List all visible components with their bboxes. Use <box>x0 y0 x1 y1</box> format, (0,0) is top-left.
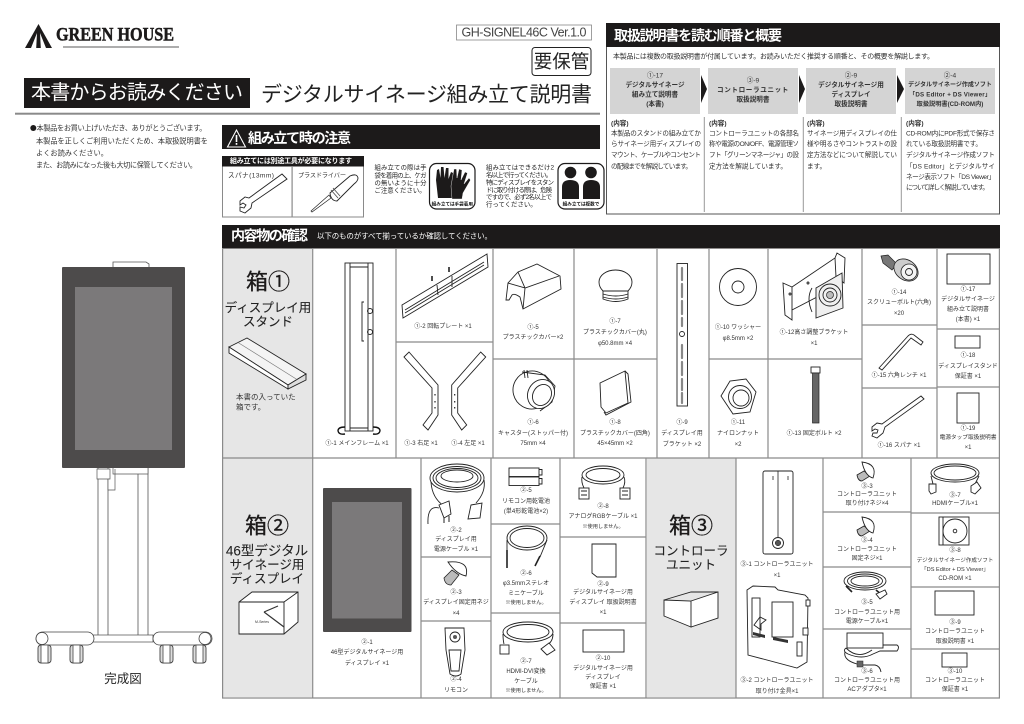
text: two people note <box>486 162 554 208</box>
item: stereo mini cable: ②-6 <box>520 569 532 577</box>
item: main frame <box>325 263 389 447</box>
item: controller warranty: ③-10 <box>948 667 963 675</box>
box 1 heading: ディスプレイ用 <box>225 300 311 315</box>
item: display screw: ②-3 <box>450 588 462 596</box>
item: power strip manual: ①-19 <box>961 424 976 432</box>
item: spanner <box>872 396 924 449</box>
item: controller power cable: 電源ケーブル×1 <box>846 617 889 625</box>
item: height adjustment bracket: ×1 <box>811 341 818 347</box>
illustration: assembled display on stand <box>36 262 212 663</box>
item: fixing screws <box>837 517 897 562</box>
item: AC adapter: コントローラユニット用 <box>834 677 900 684</box>
item: display screw: ディスプレイ固定用ネジ <box>423 598 489 606</box>
item: display bracket: ディスプレイ用 <box>661 429 703 437</box>
item: nylon nut: ×2 <box>735 442 742 448</box>
item: mounting bracket: ③-2 コントローラユニット <box>740 676 814 684</box>
top mount <box>113 262 149 267</box>
item: mounting screws <box>837 462 897 507</box>
item: analog RGB cable: ※使用しません。 <box>582 522 624 530</box>
item: controller power cable <box>834 572 900 625</box>
item: controller manual: ③-9 <box>949 618 961 626</box>
text: box note: 箱です。 <box>236 402 265 412</box>
text: box note: 本書の入っていた <box>236 392 296 402</box>
item: plastic cover: プラスチックカバー×2 <box>503 334 564 341</box>
manual step 2: コントローラユニットの各部名 <box>709 128 799 138</box>
manual step 4: (内容) <box>906 118 924 128</box>
panel: contents header <box>222 225 1000 248</box>
item: hex wrench <box>872 334 927 379</box>
item: mounting screws: 取り付けネジ×4 <box>846 499 889 507</box>
text: two people note: 組み立てはできるだけ2 <box>486 162 554 172</box>
text: box note <box>236 392 296 412</box>
item: height adjustment bracket: ①-12高さ調整ブラケット <box>780 328 848 336</box>
item: fixing screws: コントローラユニット <box>837 546 897 553</box>
item: square plastic cover: プラスチックカバー(四角) <box>580 429 650 437</box>
item: controller manual <box>925 591 985 645</box>
icon: display box: M-Series <box>255 620 269 624</box>
item: rotation plate: ①-2 回転プレート ×1 <box>414 322 472 330</box>
item: round plastic cover <box>583 270 647 347</box>
item: remote batteries: (単4形乾電池×2) <box>504 507 548 515</box>
item: right leg <box>404 352 438 447</box>
item: mounting bracket: 取り付け金具×1 <box>756 687 799 695</box>
manual step 2 <box>708 68 799 170</box>
item: assembly manual <box>941 254 995 323</box>
item: display bracket <box>661 264 703 448</box>
item: display warranty: ディスプレイ <box>585 673 621 681</box>
item: round plastic cover: φ50.8mm ×4 <box>598 341 633 347</box>
manual step 3 <box>806 68 897 170</box>
item: remote control: リモコン <box>444 687 468 694</box>
box 3 heading <box>653 514 729 572</box>
manual step 1: らサイネージ用ディスプレイの <box>611 139 701 148</box>
item: AC adapter: ACアダプタ×1 <box>847 685 887 693</box>
item: 46-inch display: ディスプレイ ×1 <box>345 659 390 667</box>
keep-safe stamp: 要保管 <box>534 51 589 72</box>
item: analog RGB cable: ②-8 <box>597 502 609 510</box>
intro text <box>30 124 208 170</box>
item: rotation plate <box>402 254 488 330</box>
item: analog RGB cable <box>568 466 638 530</box>
box 3 heading: ユニット <box>666 558 716 572</box>
item: nylon nut: ナイロンナット <box>717 430 759 437</box>
item: fixing screws: ③-4 <box>861 536 873 544</box>
item: display screw: ×4 <box>453 611 460 617</box>
icon: screwdriver <box>311 175 358 212</box>
manual step 4: ネージ表示ソフト「DS Viewer」 <box>906 172 995 181</box>
item: remote control: ②-4 <box>450 675 462 683</box>
text: gloves note: 袋を着用の上、ケガ <box>374 170 427 180</box>
item: CD-ROM: ③-8 <box>949 546 961 554</box>
item: HDMI-DVI cable: ケーブル <box>514 677 538 685</box>
item: controller manual: コントローラユニット <box>925 628 985 635</box>
box 3 heading: コントローラ <box>653 544 729 558</box>
item: controller unit: ×1 <box>774 573 781 579</box>
item: square plastic cover: 45×45mm ×2 <box>597 441 633 447</box>
header rule <box>15 113 600 115</box>
logo: GREEN HOUSE <box>25 24 179 48</box>
right foot <box>153 632 212 663</box>
item: controller warranty: コントローラユニット <box>925 677 985 684</box>
panel: required tools: 組み立てには別途工具が必要になります <box>230 156 352 165</box>
manual step 4: 「DS Editor」とデジタルサイ <box>906 162 995 170</box>
item: square plastic cover <box>580 371 650 447</box>
item: height adjustment bracket <box>780 253 848 347</box>
item: stereo mini cable: φ3.5mmステレオ <box>503 580 549 587</box>
manual step 4: 「DS Editor + DS Viewer」 <box>909 92 991 98</box>
item: caster: キャスター(ストッパー付) <box>498 429 568 437</box>
item: display manual: ×1 <box>600 610 607 616</box>
box 1 heading <box>225 270 311 329</box>
item: controller power cable: コントローラユニット用 <box>834 609 900 616</box>
box 2 heading: 箱② <box>245 514 289 538</box>
manual step 1 <box>610 68 701 170</box>
item: display warranty <box>573 630 633 690</box>
item: left leg: ①-4 左足 ×1 <box>451 439 485 447</box>
item: display warranty: 保証書 ×1 <box>590 682 617 690</box>
manual step 3: 定方法などについて解説してい <box>807 150 897 159</box>
text: gloves note: の無いように十分 <box>374 178 427 187</box>
manual step 1: 本製品のスタンドの組み立てか <box>611 128 701 138</box>
item: controller unit: ③-1 コントローラユニット <box>740 560 814 568</box>
manual step 2: 取扱説明書 <box>737 94 770 104</box>
item: fixing bolt <box>787 367 842 437</box>
manual step 1: (本書) <box>646 99 664 108</box>
manual step 2: フト「グリーンマネージャ」の設 <box>709 150 799 159</box>
box 1 heading: スタンド <box>243 315 293 329</box>
item: mounting bracket <box>740 586 814 695</box>
arrow <box>701 75 707 103</box>
item: HDMI cable: ③-7 <box>949 491 961 499</box>
box 3 heading: 箱③ <box>669 514 713 538</box>
item: round plastic cover: プラスチックカバー(丸) <box>583 328 647 336</box>
item: power cable <box>428 464 484 553</box>
manual step 2: 定方法を解説しています。 <box>709 162 787 170</box>
icon: two people <box>558 164 604 209</box>
manual step 4: ②-4 <box>944 72 957 80</box>
item: assembly manual: デジタルサイネージ <box>941 295 995 303</box>
item: left leg <box>451 352 486 447</box>
item: controller warranty: 保証書 ×1 <box>942 685 969 693</box>
item: mounting screws: ③-3 <box>861 482 873 490</box>
stand columns <box>93 468 153 642</box>
item: HDMI-DVI cable: ②-7 <box>520 657 532 665</box>
caution header: 組み立て時の注意 <box>248 130 351 146</box>
text: two people note: 特にディスプレイをスタン <box>486 178 554 186</box>
item: square plastic cover: ①-8 <box>609 418 621 426</box>
item: controller unit <box>740 471 814 579</box>
item: controller power cable: ③-5 <box>861 598 873 606</box>
icon: display box <box>239 592 298 634</box>
item: assembly manual: (本書) ×1 <box>956 315 981 323</box>
panel: contents header: 以下のものがすべて揃っているか確認してください。 <box>317 230 492 240</box>
item: HDMI cable: HDMIケーブル×1 <box>932 499 979 507</box>
item: power strip manual <box>940 393 997 451</box>
item: display screw <box>423 562 489 617</box>
item: stereo mini cable <box>503 526 549 606</box>
manual step 4: れている取扱説明書です。 <box>906 139 982 148</box>
item: mounting screws: コントローラユニット <box>837 491 897 498</box>
box 2 heading: 46型デジタル <box>226 542 308 558</box>
contents table grid <box>223 248 999 698</box>
item: display bracket: ブラケット ×2 <box>663 440 702 448</box>
panel: reading order of manuals <box>606 23 1000 214</box>
item: fixing screws: 固定ネジ×1 <box>852 554 883 562</box>
item: stereo mini cable: ミニケーブル <box>508 589 544 597</box>
manual step 3: デジタルサイネージ用 <box>818 80 884 89</box>
manual step 2: ③-9 <box>747 76 760 84</box>
item: display manual <box>569 544 637 616</box>
left foot <box>36 632 94 663</box>
panel: contents header: 内容物の確認 <box>231 228 308 244</box>
item: stand warranty <box>938 336 998 380</box>
manual step 4 <box>905 68 995 192</box>
item: CD-ROM: デジタルサイネージ作成ソフト <box>917 556 993 564</box>
item: HDMI cable <box>929 464 981 507</box>
panel: required tools: スパナ(13mm) <box>228 172 274 180</box>
item: HDMI-DVI cable: ※使用しません。 <box>505 686 547 694</box>
intro text: よくお読みください。 <box>36 148 108 158</box>
panel: required tools <box>222 156 364 217</box>
mount hardware <box>97 468 148 490</box>
manual step 3: ます。 <box>807 162 826 170</box>
item: stereo mini cable: ※使用しません。 <box>505 598 547 606</box>
intro text: 本製品を正しくご利用いただくため、本取扱説明書を <box>36 136 208 146</box>
icon: stand box <box>229 338 306 389</box>
text: two people note: ドに取り付ける際は、危険 <box>486 185 553 194</box>
item: CD-ROM: CD-ROM ×1 <box>938 576 972 582</box>
model number box: GH-SIGNEL46C Ver.1.0 <box>462 26 587 40</box>
item: hex screw bolt: ×20 <box>894 311 905 317</box>
box 2 heading <box>226 514 308 586</box>
display screen <box>62 267 185 468</box>
intro text: 本製品をお買い上げいただき、ありがとうございます。 <box>36 124 206 132</box>
manual step 2: (内容) <box>709 118 727 128</box>
item: remote batteries: リモコン用乾電池 <box>502 497 550 505</box>
icon: controller box <box>664 592 718 627</box>
item: AC adapter: ③-6 <box>861 667 873 675</box>
manual step 3: ②-9 <box>845 72 858 80</box>
manual step 3: サイネージ用ディスプレイの仕 <box>807 128 897 138</box>
item: display manual: ②-9 <box>597 580 609 588</box>
caution header <box>222 125 600 149</box>
manual step 4: について詳しく解説しています。 <box>906 182 989 192</box>
item: main frame: ①-1 メインフレーム ×1 <box>325 439 389 447</box>
manual step 3: 様や明るさやコントラストの設 <box>807 139 897 148</box>
item: power strip manual: ×1 <box>965 445 972 451</box>
item: display warranty: ②-10 <box>596 654 611 662</box>
box 2 heading: サイネージ用 <box>230 558 304 572</box>
item: assembly manual: 組み立て説明書 <box>947 305 989 313</box>
manual step 3: (内容) <box>807 118 825 128</box>
main title: デジタルサイネージ組み立て説明書 <box>261 84 592 106</box>
text: gloves note <box>374 162 427 194</box>
box 2 heading: ディスプレイ <box>230 571 304 586</box>
item: 46-inch display: ②-1 <box>361 638 373 646</box>
item: power cable: ②-2 <box>450 526 462 534</box>
item: washer <box>715 268 761 342</box>
arrow <box>897 75 904 103</box>
item: HDMI-DVI cable <box>500 622 555 694</box>
item: 46-inch display <box>323 488 412 667</box>
text: two people note: 行ってください。 <box>486 200 537 208</box>
item: hex screw bolt: スクリューボルト(六角) <box>867 298 931 306</box>
item: CD-ROM: 「DS Editor + DS Viewer」 <box>921 566 989 573</box>
manual step 4: デジタルサイネージ作成ソフト <box>908 80 992 88</box>
caption: finished view: 完成図 <box>104 672 142 686</box>
item: assembly manual: ①-17 <box>961 285 976 293</box>
item: spanner: ①-16 スパナ ×1 <box>878 441 921 449</box>
manual step 1: の配線までを解説しています。 <box>611 162 692 170</box>
panel: reading order of manuals: 取扱説明書を読む順番と概要 <box>614 27 782 43</box>
manual step 4: 取扱説明書(CD-ROM内) <box>917 100 983 108</box>
manual step 1: (内容) <box>611 118 629 128</box>
item: HDMI-DVI cable: HDMI-DVI変換 <box>506 667 546 675</box>
item: caster <box>498 364 568 447</box>
item: stand warranty: ディスプレイスタンド <box>938 362 998 370</box>
panel: required tools: プラスドライバー <box>298 172 346 180</box>
item: plastic cover <box>503 264 564 341</box>
item: controller warranty <box>925 653 985 693</box>
item: right leg: ①-3 右足 ×1 <box>404 439 438 447</box>
box 1 heading: 箱① <box>246 270 290 294</box>
arrow <box>799 75 805 103</box>
item: AC adapter <box>834 633 900 693</box>
text: gloves note: ご注意ください。 <box>374 186 426 194</box>
manual step 1: デジタルサイネージ <box>625 80 685 89</box>
icon: gloves <box>430 164 475 209</box>
manual step 3: 取扱説明書 <box>835 99 868 108</box>
item: hex screw bolt: ①-14 <box>892 288 907 296</box>
item: display bracket: ①-9 <box>676 418 688 426</box>
item: caster: 75mm ×4 <box>520 441 546 447</box>
manual step 1: マウント、ケーブルやコンセント <box>611 150 701 159</box>
item: stand warranty: ①-18 <box>961 351 976 359</box>
item: stand warranty: 保証書 ×1 <box>955 372 982 380</box>
item: controller manual: 取扱説明書 ×1 <box>936 637 975 645</box>
logo: GREEN HOUSE: GREEN HOUSE <box>56 26 174 46</box>
item: round plastic cover: ①-7 <box>609 317 621 325</box>
item: display manual: ディスプレイ 取扱説明書 <box>569 598 637 606</box>
text: two people note: 名以上で行ってください。 <box>486 170 552 179</box>
manual step 2: 称や電源のON/OFF、電源管理ソ <box>709 139 799 148</box>
icon: two people: 組み立ては複数で <box>563 200 600 208</box>
item: 46-inch display: 46型デジタルサイネージ用 <box>331 648 403 656</box>
text: gloves note: 組み立ての際は手 <box>374 162 427 172</box>
item: CD-ROM <box>917 517 993 582</box>
item: power strip manual: 電源タップ取扱説明書 <box>940 433 997 441</box>
item: analog RGB cable: アナログRGBケーブル ×1 <box>568 512 638 520</box>
read-first label: 本書からお読みください <box>31 81 243 104</box>
item: remote batteries: ②-5 <box>520 486 532 494</box>
item: power cable: ディスプレイ用 <box>435 535 477 543</box>
item: nylon nut: ①-11 <box>731 418 746 426</box>
panel: reading order of manuals: 本製品には複数の取扱説明書が付属しています。お読みいただく推奨する順番と、その概要を解説します。 <box>613 52 934 60</box>
manual step 4: CD-ROM内にPDF形式で保存さ <box>906 128 995 138</box>
item: hex screw bolt <box>867 254 931 317</box>
manual step 4: デジタルサイネージ作成ソフト <box>906 150 995 159</box>
item: power cable: 電源ケーブル ×1 <box>434 545 479 553</box>
icon: gloves: 組み立ては手袋着用 <box>432 200 473 208</box>
item: washer: φ8.5mm ×2 <box>723 336 754 342</box>
intro text: また、お読みになった後も大切に保管してください。 <box>36 160 197 170</box>
manual step 1: ①-17 <box>647 72 663 80</box>
text: two people note: ですので、必ず2名以上で <box>486 192 552 201</box>
item: remote batteries <box>502 468 550 515</box>
item: hex wrench: ①-15 六角レンチ ×1 <box>872 371 927 379</box>
manual step 2: コントローラユニット <box>717 86 789 94</box>
item: nylon nut <box>717 379 759 448</box>
item: display manual: デジタルサイネージ用 <box>573 588 633 596</box>
manual step 1: 組み立て説明書 <box>632 90 678 98</box>
item: plastic cover: ①-5 <box>527 323 539 331</box>
item: remote control <box>444 628 468 694</box>
item: caster: ①-6 <box>527 418 539 426</box>
read-first label <box>24 78 250 108</box>
manual step 3: ディスプレイ <box>831 90 871 98</box>
icon: spanner <box>240 174 287 213</box>
item: display warranty: デジタルサイネージ用 <box>573 664 633 672</box>
item: fixing bolt: ①-13 固定ボルト ×2 <box>787 429 842 437</box>
item: washer: ①-10 ワッシャー <box>715 323 761 331</box>
